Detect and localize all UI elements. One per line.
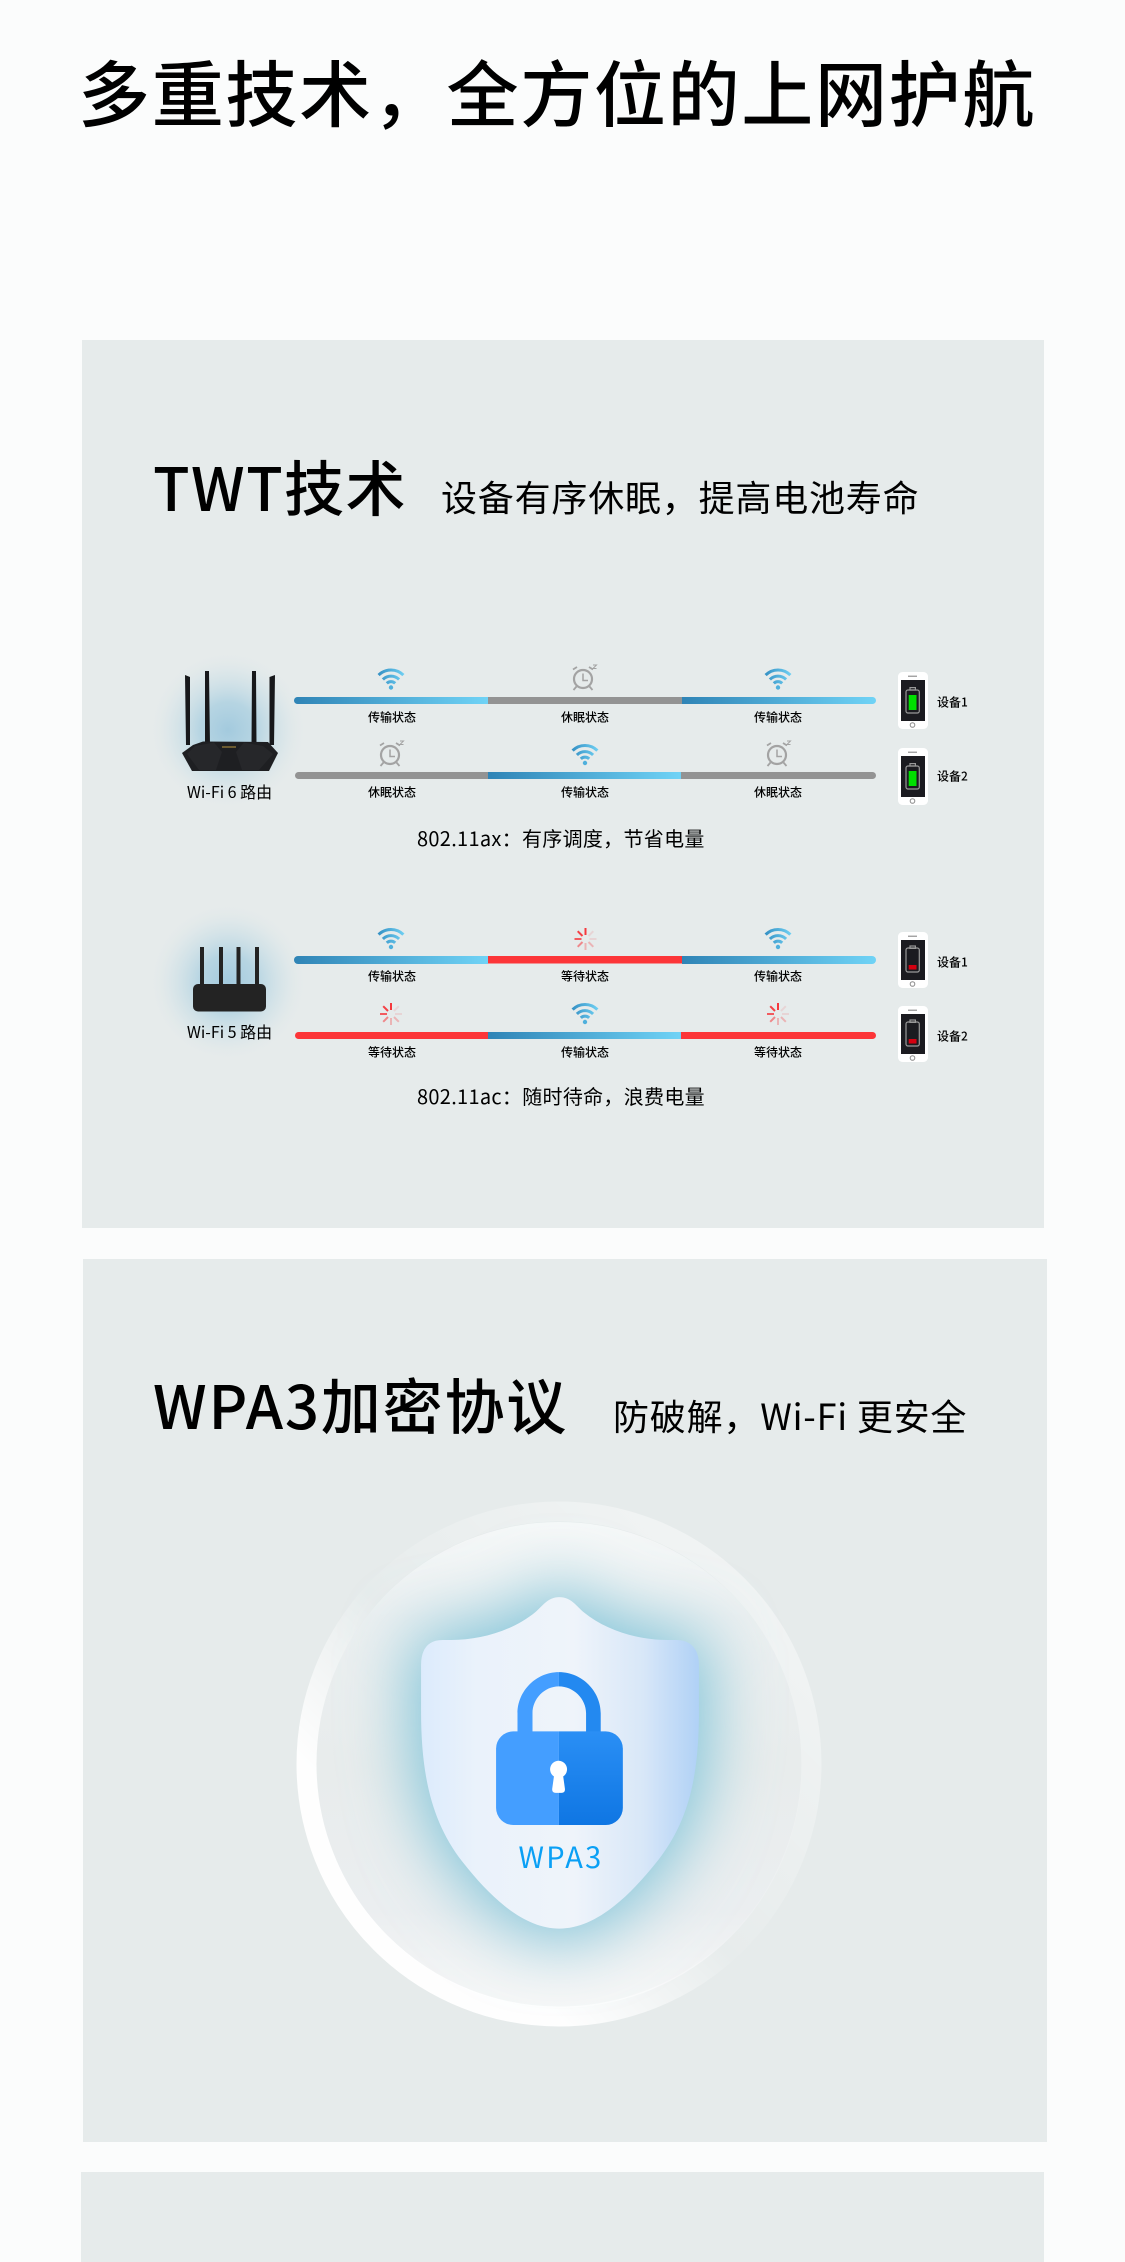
label: device 2: 设备2 xyxy=(937,1028,968,1044)
timeline: device 1 Wi-Fi 6: 传输状态 xyxy=(368,708,416,726)
label: device 2: 设备2 xyxy=(937,768,968,784)
timeline: device 2 Wi-Fi 5: 等待状态 xyxy=(368,1044,416,1060)
subheading: TWT: 设备有序休眠，提高电池寿命 xyxy=(441,470,919,522)
panel: third section start xyxy=(81,2172,1044,2262)
timeline: device 1 Wi-Fi 6: 休眠状态 xyxy=(561,708,609,726)
title: 多重技术，全方位的上网护航 xyxy=(78,37,1036,142)
icon: shield with lock xyxy=(413,1587,707,1939)
label: device 1: 设备1 xyxy=(937,954,968,970)
icon: ring and disc xyxy=(306,1512,812,2016)
timeline: device 2 Wi-Fi 6: 休眠状态 xyxy=(368,784,416,800)
timeline: device 1 Wi-Fi 5 xyxy=(294,928,876,984)
timeline: device 1 Wi-Fi 6: 传输状态 xyxy=(754,708,802,726)
timeline: device 1 Wi-Fi 6 xyxy=(294,665,876,726)
timeline: device 2 Wi-Fi 6 xyxy=(295,741,876,800)
panel: WPA3 encryption xyxy=(83,1259,1047,2142)
timeline: device 1 Wi-Fi 5: 传输状态 xyxy=(368,968,416,984)
timeline: device 2 Wi-Fi 5: 等待状态 xyxy=(754,1044,802,1060)
panel: TWT technology xyxy=(82,340,1044,1228)
caption: 802.11ac: 802.11ac：随时待命，浪费电量 xyxy=(417,1081,705,1110)
heading: WPA3: WPA3加密协议 xyxy=(153,1360,568,1447)
timeline: device 1 Wi-Fi 5: 传输状态 xyxy=(754,968,802,984)
icon: Wi-Fi 5 router xyxy=(148,902,308,1062)
timeline: device 2 Wi-Fi 6: 休眠状态 xyxy=(754,784,802,800)
timeline: device 2 Wi-Fi 6: 传输状态 xyxy=(561,784,609,800)
timeline: device 2 Wi-Fi 5: 传输状态 xyxy=(561,1044,609,1060)
label: Wi-Fi 5 router: Wi-Fi 5 路由 xyxy=(187,1019,272,1043)
label: Wi-Fi 6 router: Wi-Fi 6 路由 xyxy=(187,779,272,803)
timeline: device 2 Wi-Fi 5 xyxy=(295,1003,876,1060)
label: device 1: 设备1 xyxy=(937,694,968,710)
icon: phone full battery 1 xyxy=(898,672,928,729)
caption: 802.11ax: 802.11ax：有序调度，节省电量 xyxy=(417,823,705,852)
icon: phone full battery 2 xyxy=(898,748,928,805)
subheading: WPA3: 防破解，Wi-Fi 更安全 xyxy=(613,1389,967,1441)
heading: TWT: TWT技术 xyxy=(153,442,407,529)
icon: phone low battery 1 xyxy=(898,932,928,988)
icon: phone low battery 2 xyxy=(898,1006,928,1062)
timeline: device 1 Wi-Fi 5: 等待状态 xyxy=(561,968,609,984)
icon: Wi-Fi 6 router xyxy=(148,650,308,810)
label: WPA3: WPA3 xyxy=(518,1835,604,1877)
